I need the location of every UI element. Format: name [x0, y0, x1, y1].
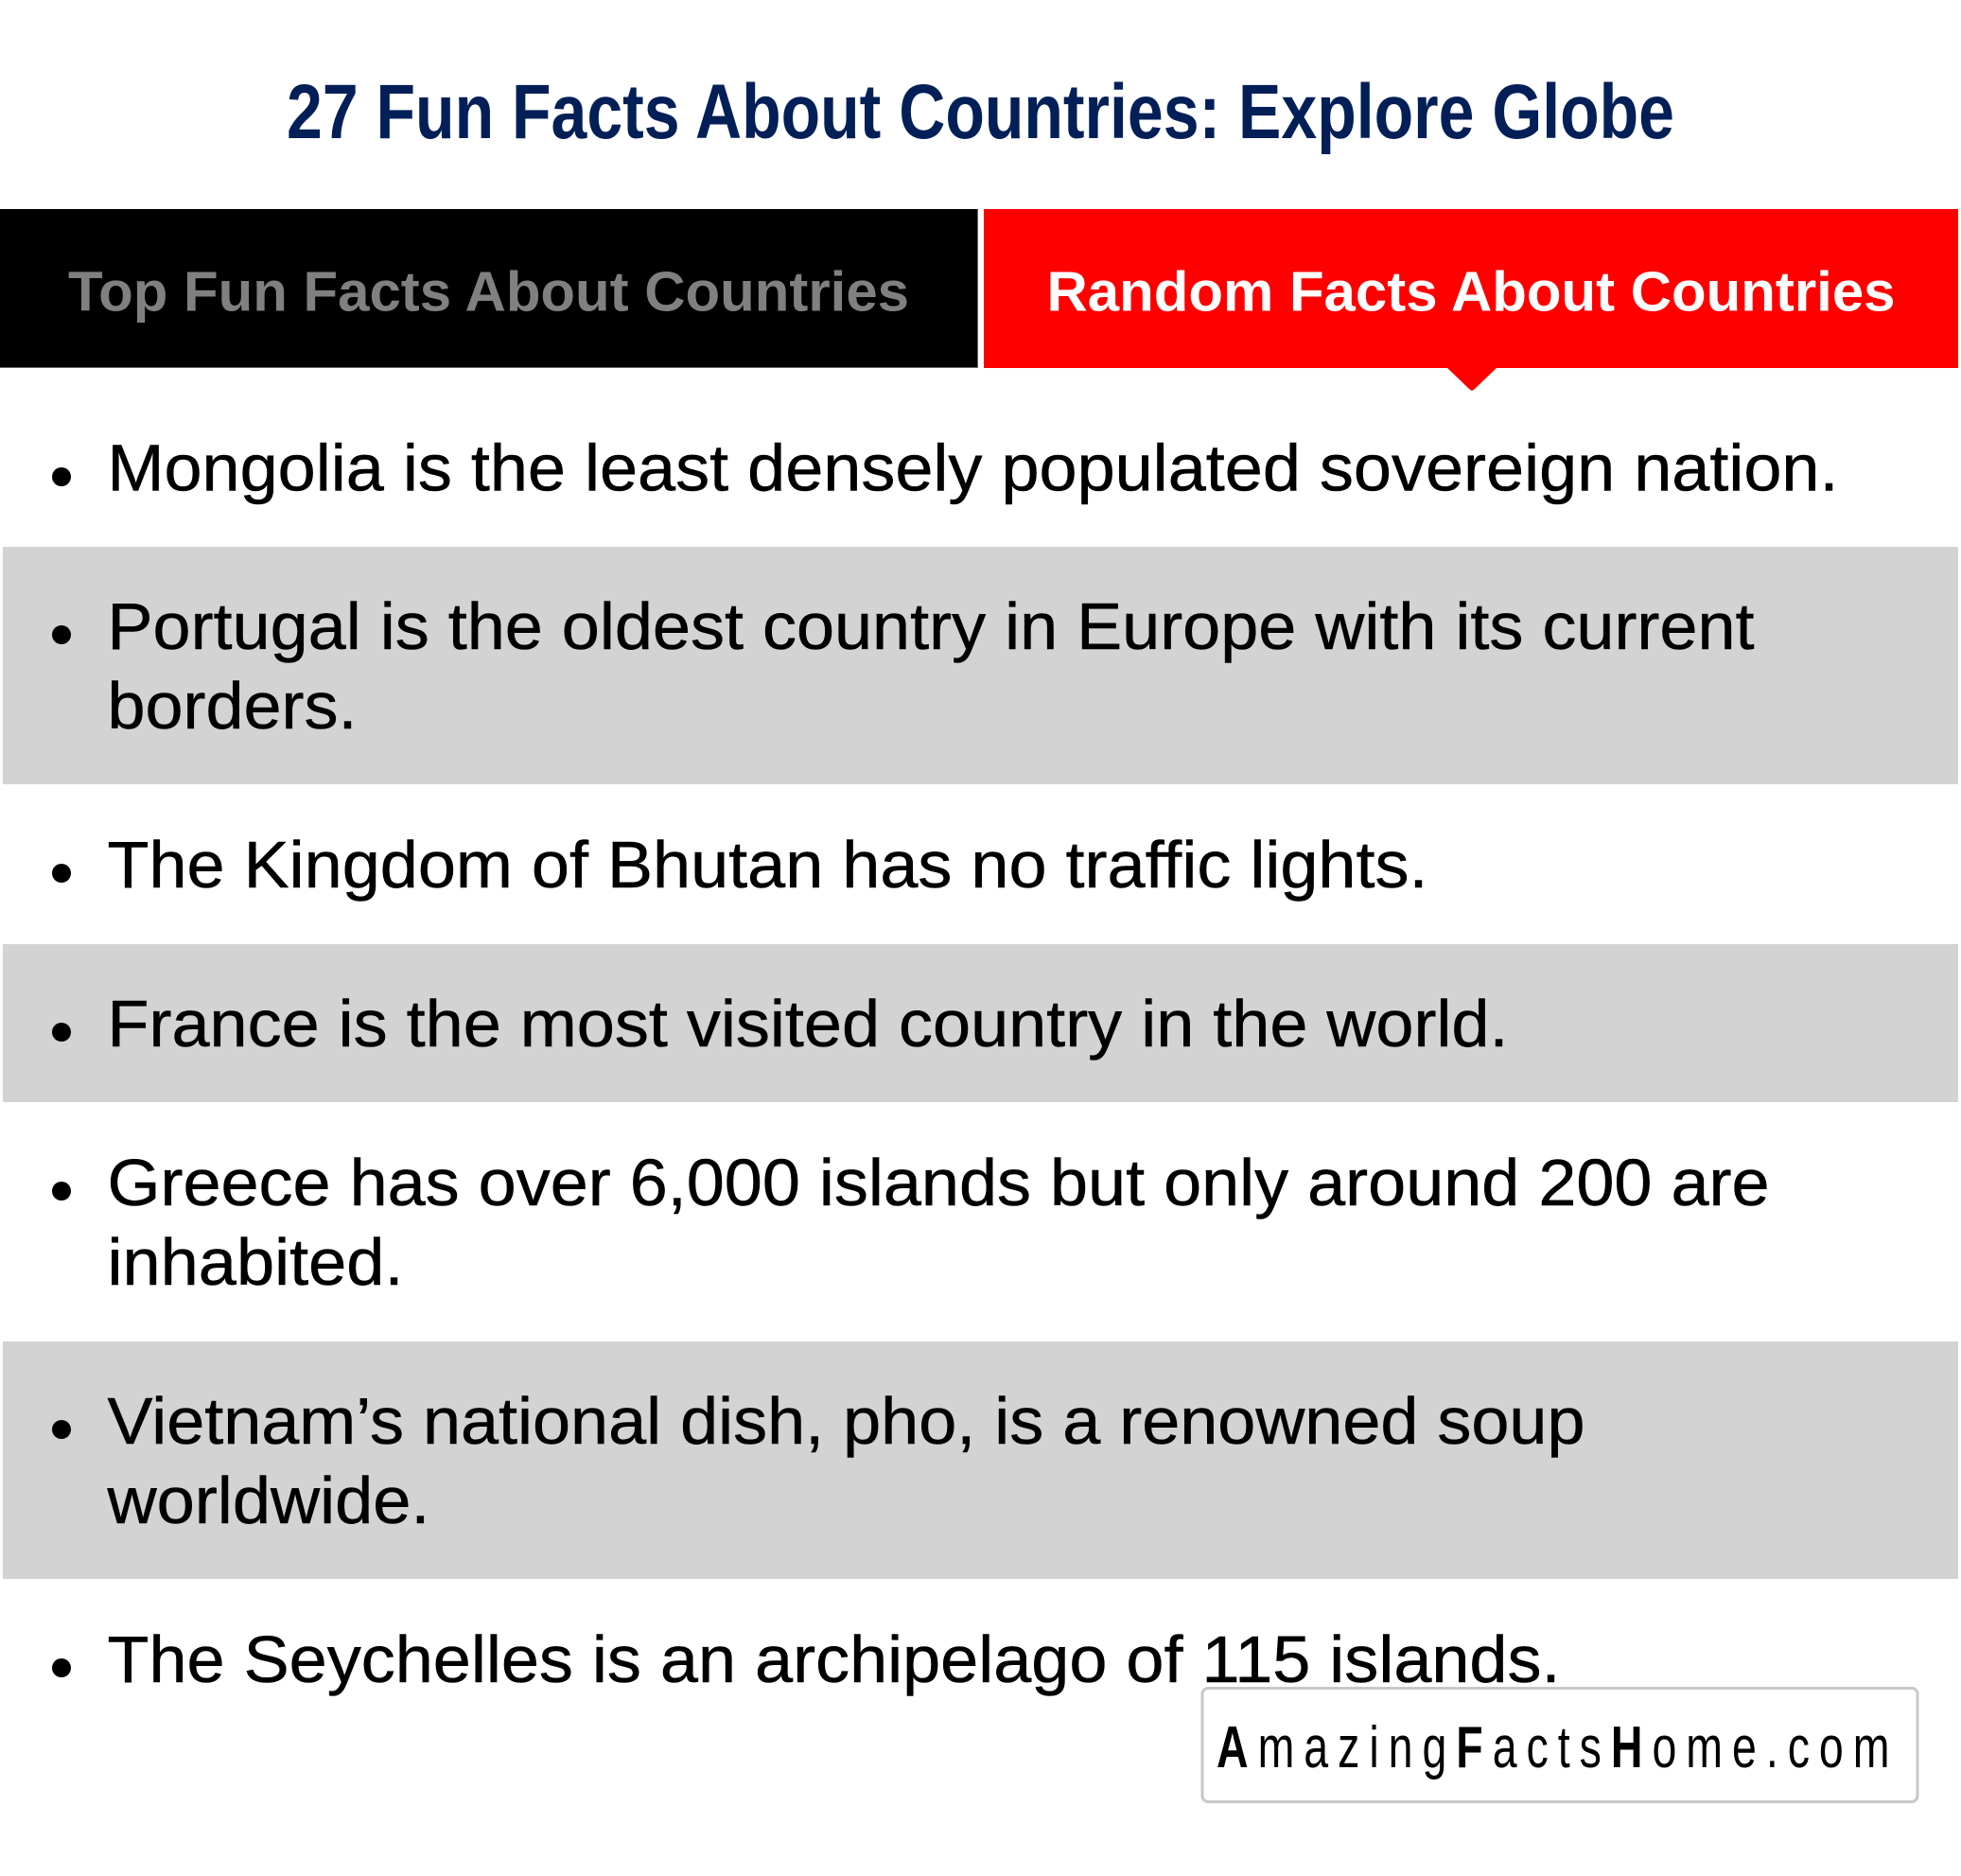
list row 5: Greece — [52, 1146, 1769, 1299]
list row 6: Vietnam — [3, 1341, 1958, 1579]
list row 1: Mongolia: Mongolia is the least densely populated sovereign nation. — [108, 431, 1839, 505]
tab: top fun facts — [0, 209, 978, 368]
list row 6: Vietnam: Vietnam’s national dish, pho, is a renowned soup — [108, 1384, 1585, 1458]
title: 27 Fun Facts About Countries: Explore Globe — [287, 69, 1674, 155]
list row 4: France — [3, 944, 1958, 1102]
list row 3: Bhutan: The Kingdom of Bhutan has no traffic lights. — [108, 828, 1428, 902]
watermark — [1202, 1688, 1917, 1801]
tab: random facts (active): Random Facts About Countries — [1046, 261, 1896, 324]
list row 2: Portugal: Portugal is the oldest country in Europe with its current — [108, 589, 1754, 663]
list row 4: France: France is the most visited country in the world. — [108, 987, 1508, 1061]
list row 6: Vietnam: worldwide. — [106, 1464, 429, 1537]
list row 2: Portugal — [3, 547, 1958, 784]
tab: top fun facts: Top Fun Facts About Countries — [68, 261, 909, 324]
watermark: AmazingFactsHome.com — [1217, 1713, 1899, 1780]
list row 5: Greece: Greece has over 6,000 islands but only around 200 are — [108, 1146, 1769, 1219]
list row 2: Portugal: borders. — [108, 669, 358, 743]
list row 5: Greece: inhabited. — [108, 1225, 403, 1299]
tab: random facts (active) — [984, 209, 1958, 391]
list row 7: Seychelles: The Seychelles is an archipelago of 115 islands. — [108, 1622, 1561, 1696]
